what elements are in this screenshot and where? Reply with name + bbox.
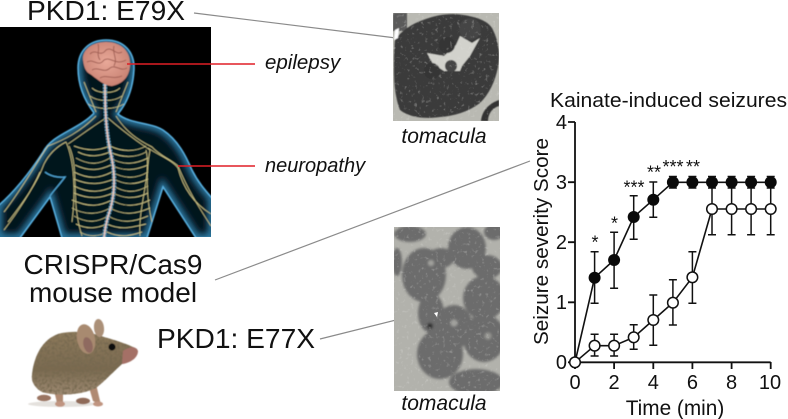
micrograph: upper tomacula [393, 13, 499, 121]
panel: human nervous system illustration [0, 27, 212, 238]
heading: CRISPR/Cas9 mouse model: mouse model [29, 277, 197, 308]
y axis label: Seizure severity Score [530, 138, 553, 345]
significance asterisks: * [611, 214, 618, 234]
y tick labels: 4 [556, 112, 567, 134]
micrograph: lower tomacula [394, 227, 500, 391]
callout line: brain to epilepsy [127, 63, 255, 65]
caption: upper tomacula: tomacula [401, 125, 487, 148]
body outline [0, 40, 212, 238]
chart: kainate-induced seizure severity [530, 90, 787, 419]
x tick labels: 8 [726, 372, 737, 394]
significance asterisks: ** [686, 157, 700, 177]
connector: E77X to lower tomacula [320, 313, 424, 339]
body silhouette [0, 40, 212, 238]
connector: mouse model to seizure chart [215, 161, 530, 280]
y tick labels: 0 [556, 352, 567, 374]
caption: lower tomacula: tomacula [401, 392, 487, 415]
callout line: arm to neuropathy [178, 165, 255, 167]
significance asterisks: ** [647, 162, 661, 182]
x tick labels: 10 [759, 372, 781, 394]
series: open circles [570, 204, 776, 368]
peripheral nerves [4, 82, 211, 236]
error bars: open series [591, 182, 775, 356]
x tick labels: 0 [569, 372, 581, 394]
heading: PKD1 E77X: PKD1: E77X [157, 323, 315, 354]
axes [568, 122, 771, 369]
y tick labels: 3 [556, 172, 567, 194]
icon: mouse [28, 319, 138, 407]
y tick labels [556, 112, 567, 374]
significance asterisks: *** [662, 157, 684, 177]
y tick labels: 1 [556, 292, 567, 314]
heading: CRISPR/Cas9 mouse model: CRISPR/Cas9 [24, 249, 202, 280]
x tick labels: 6 [687, 372, 698, 394]
heading: CRISPR/Cas9 mouse model [24, 249, 202, 308]
label: epilepsy: epilepsy [265, 51, 342, 74]
chart title: Kainate-induced seizures [550, 90, 787, 112]
error bars: filled series [591, 176, 775, 303]
brain [83, 42, 130, 86]
armpit fold [45, 172, 65, 196]
connector: E79X to upper tomacula [194, 13, 396, 38]
x tick labels: 2 [609, 372, 620, 394]
x tick labels: 4 [648, 372, 659, 394]
significance asterisks [591, 157, 700, 252]
series: filled circles [575, 176, 777, 362]
inner glow [0, 40, 212, 238]
y tick labels: 2 [556, 232, 567, 254]
x tick labels [569, 372, 781, 394]
spine [104, 84, 114, 238]
significance asterisks: *** [623, 178, 645, 198]
label: neuropathy: neuropathy [265, 155, 366, 177]
significance asterisks: * [591, 232, 599, 252]
